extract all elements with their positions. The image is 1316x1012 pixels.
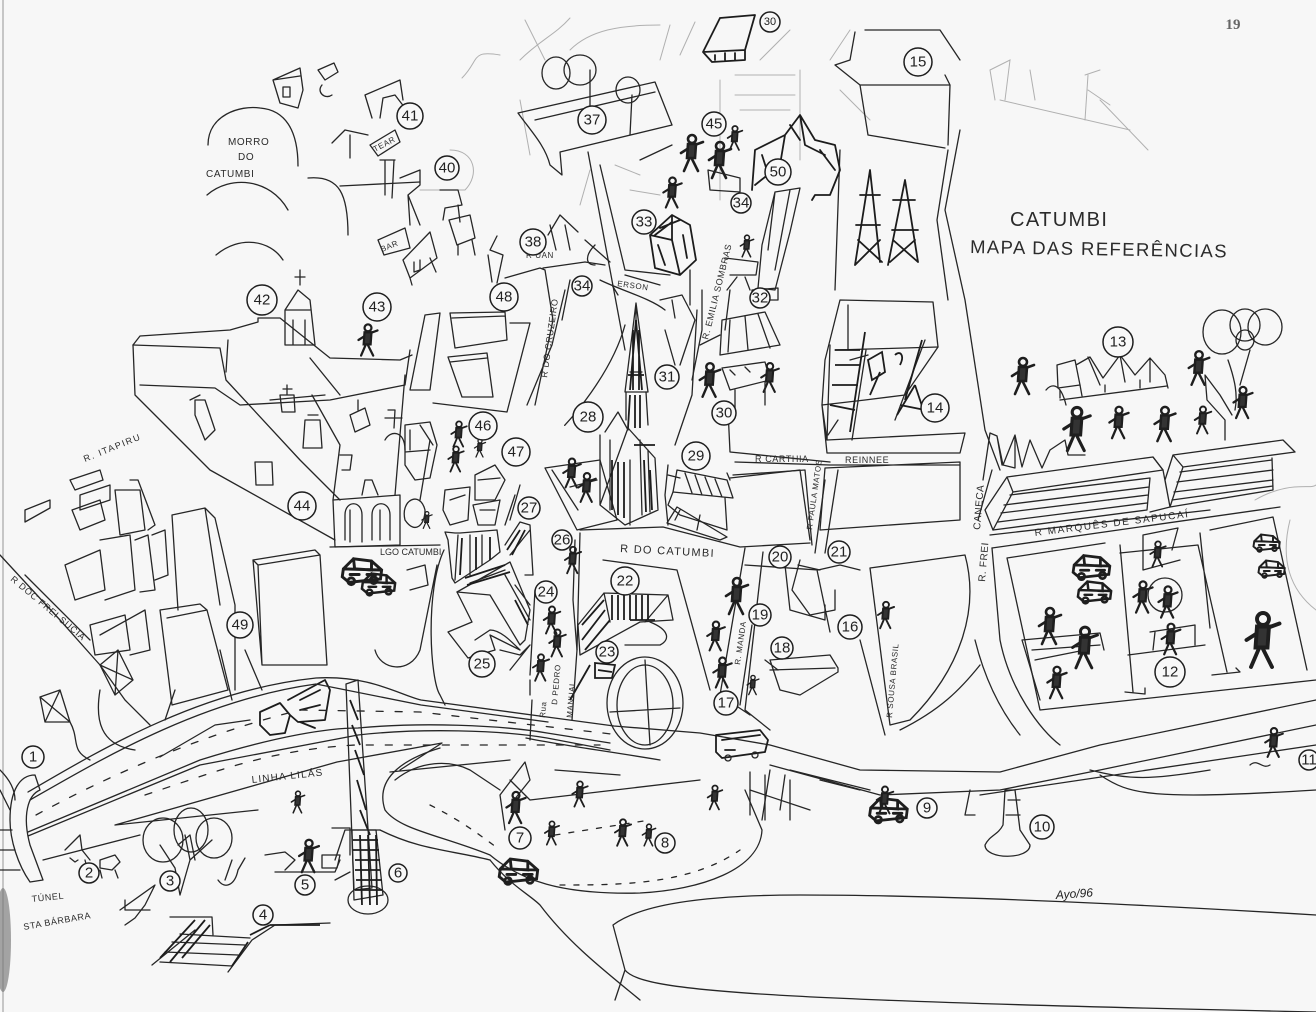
- chimney lattice: [350, 700, 382, 905]
- left road edge: [0, 555, 262, 750]
- 13 zigzag pavilion: [1057, 355, 1168, 400]
- bars and figures 40 and 41: [332, 80, 610, 285]
- block 14 hatching: [830, 332, 925, 432]
- cemetery gate: [330, 480, 441, 557]
- numbered markers: 26: [554, 532, 570, 548]
- cemetery hill and paths: [133, 318, 430, 540]
- tunnel: STA BÁRBARA: [23, 910, 92, 932]
- stairs hatch: [160, 920, 320, 966]
- bus: [716, 730, 768, 761]
- figures 24 to 26 and Rua Pedro label: D PEDRO: [550, 664, 563, 705]
- street labels left: R. EMILIA SOMBRAS: [700, 243, 734, 340]
- numbered markers: 44: [294, 498, 310, 514]
- transmission towers: [855, 170, 918, 265]
- numbered markers: 24: [538, 584, 554, 600]
- numbered markers: 22: [617, 572, 633, 590]
- R. do Catumbi: [577, 527, 810, 690]
- bars and figures 40 and 41: TEAR: [372, 135, 397, 154]
- numbered markers: 17: [718, 694, 734, 712]
- morro do catumbi hill: MORRO: [228, 137, 269, 148]
- kite: [40, 690, 90, 760]
- street labels right: [972, 484, 1190, 582]
- numbered markers: 29: [688, 448, 704, 464]
- road R. Cartola / R. Cardeal: R CARTHIA: [755, 454, 809, 464]
- small houses 46 47: [405, 421, 520, 525]
- morro do catumbi hill: CATUMBI: [206, 169, 254, 180]
- numbered markers: 38: [525, 234, 541, 250]
- numbered markers: 48: [496, 288, 512, 306]
- street labels left: R DOC FREI SUCIA: [9, 574, 88, 642]
- numbered markers: 6: [394, 864, 402, 882]
- figures 24 to 26 and Rua Pedro label: MANUAL: [565, 681, 577, 718]
- numbered markers: 1: [29, 748, 37, 766]
- title: MAPA DAS REFERÊNCIAS: [970, 236, 1228, 262]
- hilltop houses: [273, 63, 338, 108]
- players in plaza 7 and 8: [291, 762, 722, 846]
- sambódromo blocks: [900, 507, 1316, 745]
- numbered markers: 47: [508, 444, 524, 460]
- lower roads and plaza: [380, 748, 1316, 1012]
- numbered markers: 34: [574, 278, 590, 294]
- street strip and players 17 to 20: [707, 548, 770, 730]
- numbered markers: 12: [1162, 664, 1178, 680]
- car on lower road: [499, 859, 538, 884]
- numbered markers: 20: [772, 548, 788, 566]
- graves: [190, 385, 405, 485]
- numbered markers: 37: [584, 112, 600, 128]
- numbered markers: 18: [774, 640, 790, 656]
- numbered markers: 10: [1034, 818, 1050, 836]
- numbered markers: 15: [910, 54, 926, 70]
- building 31: [565, 270, 730, 445]
- numbered markers: 43: [369, 298, 385, 316]
- reclining figures: [120, 858, 245, 925]
- cemetery gate: LGO CATUMBI: [380, 547, 441, 557]
- signature: Ayo/96: [1054, 885, 1094, 902]
- numbered markers: 49: [232, 616, 248, 634]
- numbered markers: 25: [474, 656, 490, 672]
- streets around 38 and 34: [505, 251, 665, 405]
- stall 5: [265, 828, 380, 880]
- Linha Lilás road: LINHA LILÁS: [251, 766, 324, 786]
- numbered markers: 21: [831, 544, 847, 560]
- left apartment blocks: [25, 470, 327, 705]
- numbered markers: 28: [580, 408, 596, 426]
- chapel 42: [285, 270, 378, 356]
- top building 30: [703, 15, 755, 62]
- building 33: [650, 215, 696, 275]
- block 37 garden: [518, 55, 672, 350]
- page number: 19: [1226, 17, 1240, 33]
- athletes row: [978, 351, 1253, 520]
- street strip and players 17 to 20: R. MANDA: [733, 620, 748, 665]
- numbered markers: 5: [301, 876, 309, 894]
- tunnel: TÚNEL: [31, 891, 65, 904]
- numbered markers: 27: [521, 500, 537, 516]
- numbered markers: 42: [254, 292, 270, 308]
- numbered markers: 30: [716, 404, 732, 422]
- R. do Catumbi: R DO CATUMBI: [620, 543, 715, 560]
- numbered markers: 31: [659, 368, 675, 386]
- numbered markers: 8: [661, 834, 669, 852]
- block 14 stadium: [822, 300, 965, 453]
- truck: [260, 680, 330, 735]
- building 22 hatching: [582, 595, 655, 650]
- title: [970, 209, 1228, 262]
- road R. Cartola / R. Cardeal: [730, 454, 960, 540]
- building 29: [665, 465, 812, 545]
- building 15: [835, 30, 1000, 470]
- numbered markers: 14: [927, 400, 943, 416]
- numbered markers: 19: [752, 606, 768, 624]
- tunnel: [0, 770, 140, 932]
- bars and figures 40 and 41: BAR: [379, 239, 400, 254]
- numbered markers: 40: [439, 160, 455, 176]
- street labels left: R. ITAPIRU: [82, 432, 143, 464]
- cemetery block 48: [410, 312, 530, 412]
- numbered markers: 32: [752, 290, 768, 306]
- stands along R. Marquês de Sapucaí: [985, 440, 1295, 530]
- small block 16 to 21: R SOUSA BRASIL: [885, 643, 900, 718]
- numbered markers: 23: [599, 644, 615, 660]
- numbered markers: 46: [475, 418, 491, 434]
- numbered markers: 50: [770, 164, 786, 180]
- streets around 38 and 34: R UAN: [526, 251, 554, 260]
- trees: [143, 808, 232, 895]
- morro do catumbi hill: [206, 107, 420, 260]
- small block 16 to 21: [745, 470, 970, 735]
- houses 27 hatching: [460, 530, 528, 625]
- numbered markers: 3: [166, 872, 174, 890]
- figures 45: [663, 126, 742, 208]
- streets around 38 and 34: ERSON: [617, 279, 649, 292]
- numbered markers: 45: [706, 116, 722, 132]
- trees near 13: [1203, 309, 1282, 410]
- numbered markers: 7: [516, 830, 524, 846]
- morro do catumbi hill: DO: [238, 152, 254, 163]
- stairs 4: [152, 917, 330, 972]
- cars at largo: [342, 559, 428, 595]
- numbered markers: 30: [764, 16, 776, 28]
- building 50: [752, 115, 840, 200]
- street labels right: R. FREI: [977, 542, 991, 582]
- fountain 10: [985, 790, 1030, 856]
- dogs: [65, 835, 120, 878]
- Linha Lilás road: [28, 678, 1316, 836]
- building 22: [578, 593, 673, 655]
- numbered markers: 34: [733, 194, 749, 212]
- road R. Cartola / R. Cardeal: R PAULA MATOS: [805, 459, 824, 530]
- right-edge figures 11: [1250, 728, 1283, 766]
- building 23: [570, 663, 615, 700]
- numbered markers: 9: [923, 800, 931, 816]
- church: [545, 303, 658, 530]
- street labels left: R DO CRUZEIRO: [539, 298, 560, 378]
- chimney: [346, 680, 388, 914]
- church spire dark: [612, 320, 655, 518]
- overpass columns: [750, 772, 975, 820]
- road R. Cartola / R. Cardeal: REINNEE: [845, 455, 889, 465]
- numbered markers: 13: [1110, 334, 1126, 350]
- figures 24 to 26 and Rua Pedro label: [530, 540, 581, 740]
- street labels left: [9, 243, 734, 642]
- numbered markers: 41: [402, 108, 418, 124]
- numbered markers: 33: [636, 214, 652, 230]
- group 9: [870, 786, 907, 823]
- market stall 30: [700, 312, 830, 462]
- faint upper sketch lines: [420, 18, 1316, 610]
- houses 27 and 25: [375, 522, 533, 705]
- street labels right: R MARQUÊS DE SAPUCAÍ: [1034, 507, 1190, 539]
- door and stand 32: [725, 188, 800, 300]
- figures 24 to 26 and Rua Pedro label: Rua: [538, 701, 548, 718]
- numbered markers: 16: [842, 618, 858, 636]
- numbered markers: 2: [85, 864, 93, 882]
- page edge and binding shadow: [0, 0, 11, 1012]
- dome / sphere: [607, 657, 683, 749]
- numbered markers: 4: [259, 906, 267, 924]
- block 12 athletes and cars: [1022, 528, 1285, 700]
- street labels right: CANECA: [972, 484, 987, 530]
- title: CATUMBI: [1010, 209, 1108, 231]
